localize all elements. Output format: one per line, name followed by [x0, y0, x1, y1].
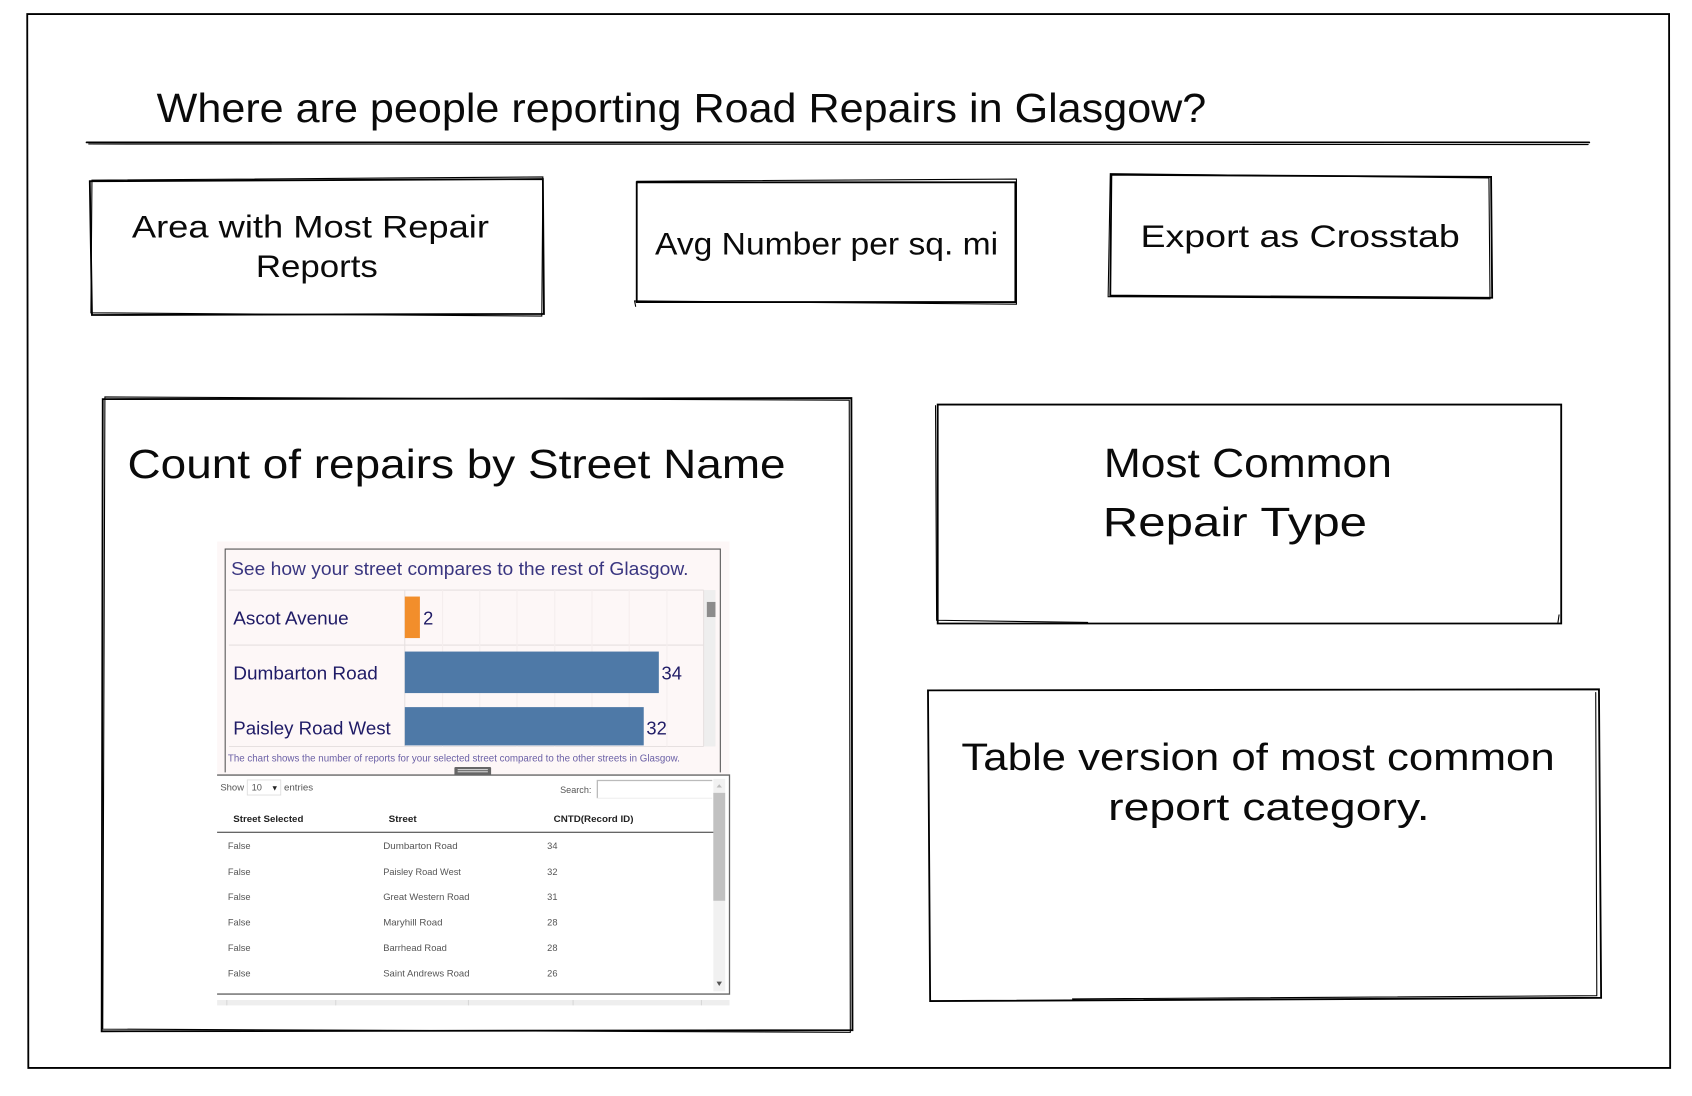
table rows: False [228, 918, 251, 928]
table rows: False [228, 943, 251, 953]
table rows: Maryhill Road [383, 918, 443, 928]
panel: most common repair type [936, 405, 1561, 624]
table header: CNTD(Record ID) [554, 814, 633, 825]
bar row: Dumbarton Road 34: 34 [662, 663, 682, 684]
table rows: 28 [547, 943, 558, 953]
table length control [220, 780, 313, 795]
table length control: Show [220, 783, 244, 793]
table header: Street [389, 814, 418, 825]
bar row: Ascot Avenue 2: 2 [423, 608, 433, 629]
panel: area with most repair reports: Area with Most Repair [132, 209, 489, 244]
bar row: Dumbarton Road 34: Dumbarton Road [233, 663, 378, 684]
table rows [228, 841, 558, 978]
table rows: 32 [547, 867, 558, 877]
panel: table version of most common report category: report category. [1108, 786, 1430, 828]
panel: count of repairs by street name [102, 397, 852, 1032]
panel: export as crosstab: Export as Crosstab [1140, 219, 1460, 254]
panel: area with most repair reports [90, 177, 544, 316]
panel: average number per square mile: Avg Number per sq. mi [655, 227, 998, 262]
table search box [560, 780, 712, 798]
table length control: entries [284, 783, 313, 793]
table rows: Paisley Road West [383, 867, 461, 877]
table header [217, 814, 713, 832]
panel: most common repair type: Repair Type [1103, 499, 1367, 545]
table rows: 34 [547, 841, 558, 851]
panel: table version of most common report category: Table version of most common [961, 736, 1555, 778]
table search box: Search: [560, 785, 591, 795]
resize handle [454, 767, 491, 776]
bar row: Paisley Road West 32 [233, 707, 667, 745]
table rows: False [228, 841, 251, 851]
table length control: 10 [252, 783, 262, 793]
panel: export as crosstab [1108, 174, 1492, 299]
table length control: ▼ [271, 784, 279, 793]
table rows: 26 [547, 968, 558, 978]
table header: Street Selected [233, 814, 304, 825]
panel: area with most repair reports: Reports [256, 249, 378, 284]
table rows: False [228, 968, 251, 978]
table rows: 31 [547, 892, 558, 902]
heading: count of repairs: Count of repairs by Street Name [128, 441, 786, 487]
bar row: Dumbarton Road 34 [233, 652, 682, 693]
panel: table version of most common report category [928, 689, 1601, 1001]
table rows: Barrhead Road [383, 943, 447, 953]
panel: average number per square mile [635, 179, 1016, 306]
bar row: Paisley Road West 32: Paisley Road West [233, 718, 391, 739]
table rows: False [228, 892, 251, 902]
table rows: Saint Andrews Road [383, 968, 470, 978]
table rows: Great Western Road [383, 892, 470, 902]
embedded screenshot: street bar chart [217, 542, 729, 776]
table rows: False [228, 867, 251, 877]
embedded screenshot: street bar chart: See how your street compares to the rest of Glasgow. [231, 558, 689, 579]
bar row: Ascot Avenue 2 [233, 597, 433, 638]
title with underline: Where are people reporting Road Repairs in Glasgow? [157, 85, 1206, 131]
panel: most common repair type: Most Common [1104, 440, 1392, 486]
bar row: Ascot Avenue 2: Ascot Avenue [233, 608, 349, 629]
embedded screenshot: data table [217, 775, 729, 1005]
chart caption: The chart shows the number of reports for your selected street compared to the other streets in Glasgow. [228, 754, 680, 765]
table rows: Dumbarton Road [383, 841, 458, 851]
table rows: 28 [547, 918, 558, 928]
table scrollbar [713, 779, 725, 991]
bar row: Paisley Road West 32: 32 [646, 718, 667, 739]
